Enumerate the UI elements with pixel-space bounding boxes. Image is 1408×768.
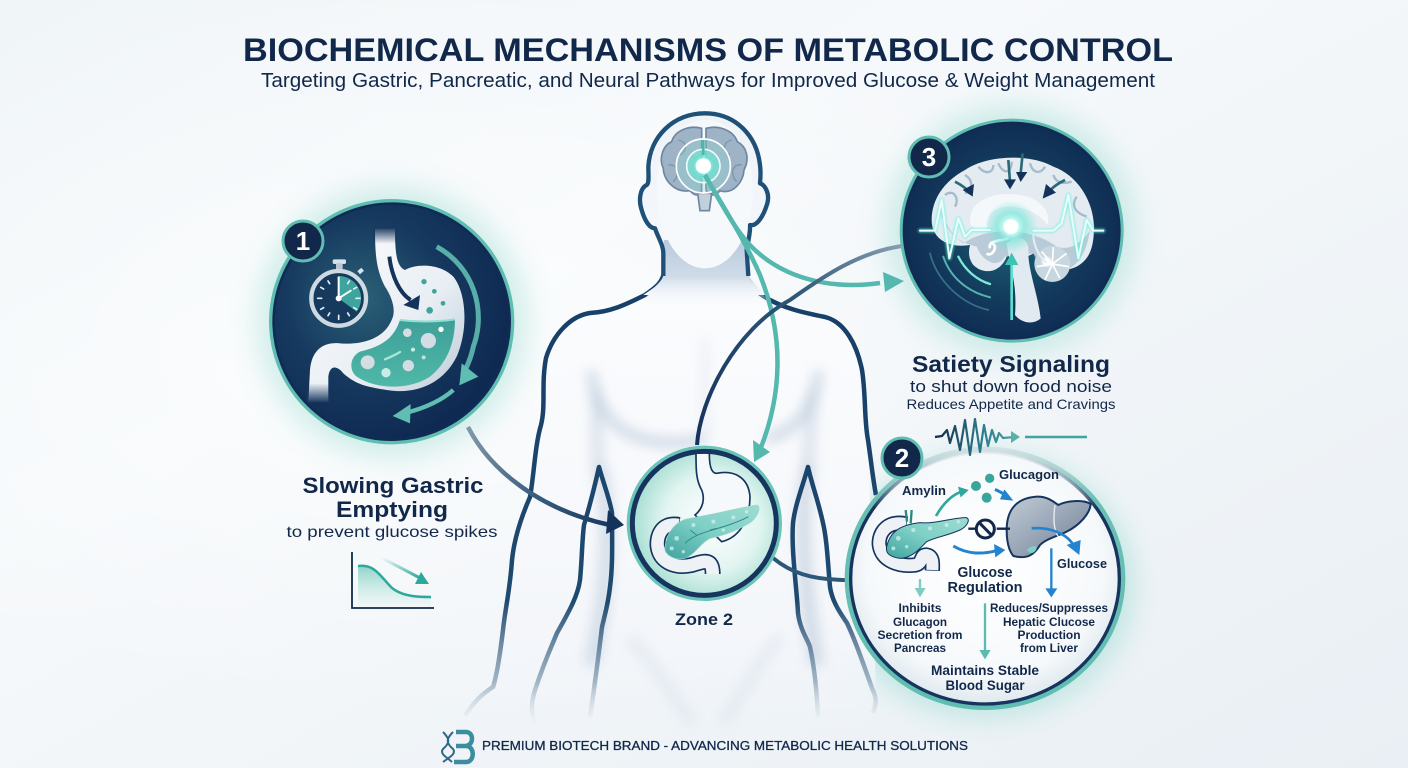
human body silhouette bbox=[465, 270, 876, 732]
brainstem bbox=[1007, 238, 1041, 322]
icon: pancreas bbox=[658, 505, 759, 574]
title: BIOCHEMICAL MECHANISMS OF METABOLIC CONTROL bbox=[243, 32, 1173, 68]
right arm outer outline bbox=[746, 270, 876, 495]
icon: noise wave to flat line bbox=[935, 419, 1087, 455]
icon: rising arrow bbox=[1005, 253, 1018, 320]
footer text: PREMIUM BIOTECH BRAND - ADVANCING METABOLIC HEALTH SOLUTIONS bbox=[482, 738, 968, 753]
panel 3: satiety signalling bbox=[900, 119, 1124, 343]
panel 2 text: from Liver bbox=[1020, 643, 1079, 655]
blue arrows bbox=[953, 489, 1081, 597]
icon: stomach bbox=[695, 454, 750, 542]
zone 2 circle bbox=[627, 446, 782, 601]
panel 2 text: Glucose bbox=[958, 565, 1012, 581]
left arm outer outline bbox=[465, 270, 664, 716]
badge 2: 2 bbox=[895, 443, 909, 473]
panel 3 label: to shut down food noise bbox=[910, 377, 1112, 396]
panel 2 text: Inhibits bbox=[898, 603, 942, 615]
head bbox=[640, 113, 770, 307]
panel 2 text: Reduces/Suppresses bbox=[990, 603, 1108, 615]
inner arm and torso right bbox=[793, 467, 876, 717]
panel 1 label: Emptying bbox=[336, 497, 448, 522]
icon: brain bbox=[932, 158, 1094, 322]
face bbox=[657, 120, 753, 268]
neck shadow bbox=[640, 240, 770, 307]
panel 2 text: Production bbox=[1018, 630, 1080, 642]
footer logo bbox=[442, 732, 473, 762]
icon: liver bbox=[1007, 497, 1091, 557]
connector: brain to panel 3 bbox=[705, 175, 904, 292]
icon: slowing arrows bbox=[393, 247, 478, 423]
panel 2 text: Hepatic Clucose bbox=[1003, 617, 1095, 629]
connector: panel 1 to zone 2 bbox=[468, 427, 624, 534]
panel 1 label: to prevent glucose spikes bbox=[286, 524, 498, 541]
icon: inhibit symbol bbox=[968, 520, 1010, 538]
icon: pancreas bbox=[879, 510, 968, 571]
chart: glucose curve bbox=[352, 552, 434, 608]
teal arrows bbox=[915, 579, 991, 659]
panel 1: gastric emptying bbox=[269, 199, 514, 444]
head and neck fill bbox=[640, 113, 768, 295]
panel 2 text: Glucagon bbox=[893, 617, 947, 629]
panel 3 label: Satiety Signaling bbox=[912, 351, 1110, 377]
panel 2 text: Secretion from bbox=[878, 630, 962, 642]
cerebellum bbox=[1034, 246, 1070, 282]
badge 1: 1 bbox=[296, 226, 310, 256]
panel 1 label: Slowing Gastric bbox=[302, 473, 484, 498]
icon: stomach bbox=[307, 227, 464, 403]
glow core bbox=[984, 200, 1038, 253]
badge 3 bbox=[909, 137, 949, 177]
panel 2 text: Glucose bbox=[1057, 556, 1107, 571]
inner arm and torso left bbox=[532, 467, 612, 727]
panel 2 text: Pancreas bbox=[894, 643, 946, 655]
torso and arms fill bbox=[465, 270, 876, 732]
badge 3: 3 bbox=[922, 142, 936, 172]
panel 2 text bbox=[878, 467, 1108, 693]
panel 2 text: Regulation bbox=[948, 580, 1022, 596]
icon: inward arrows bbox=[955, 153, 1065, 199]
body shading bbox=[592, 340, 818, 720]
icon: stopwatch bbox=[311, 259, 366, 326]
connector: zone 2 to panel 3 bbox=[697, 246, 902, 445]
panel 2 text: Glucagon bbox=[999, 467, 1059, 482]
panel 2: glucose regulation bbox=[845, 447, 1125, 710]
icon: pulse line bbox=[920, 195, 1103, 258]
connector: zone 2 to panel 2 bbox=[773, 558, 848, 580]
badge 1 bbox=[283, 221, 323, 261]
panel 2 text: Maintains Stable bbox=[931, 663, 1039, 678]
panel 2 text: Blood Sugar bbox=[946, 678, 1025, 693]
amylin arrow and particles bbox=[936, 474, 994, 516]
glow rings bbox=[676, 139, 730, 193]
zone 2 label: Zone 2 bbox=[675, 610, 733, 629]
badge 2 bbox=[882, 438, 922, 478]
head outline bbox=[640, 113, 768, 276]
panel 2 text: Amylin bbox=[902, 483, 946, 498]
panel 1 label bbox=[286, 473, 498, 541]
subtitle: Targeting Gastric, Pancreatic, and Neural Pathways for Improved Glucose & Weight Management bbox=[261, 70, 1155, 92]
brain in head bbox=[661, 127, 747, 211]
icon: signal arcs bbox=[930, 253, 990, 310]
panel 3 label bbox=[906, 351, 1116, 412]
panel 3 label: Reduces Appetite and Cravings bbox=[906, 396, 1116, 412]
connector: brain to zone 2 bbox=[705, 175, 777, 462]
